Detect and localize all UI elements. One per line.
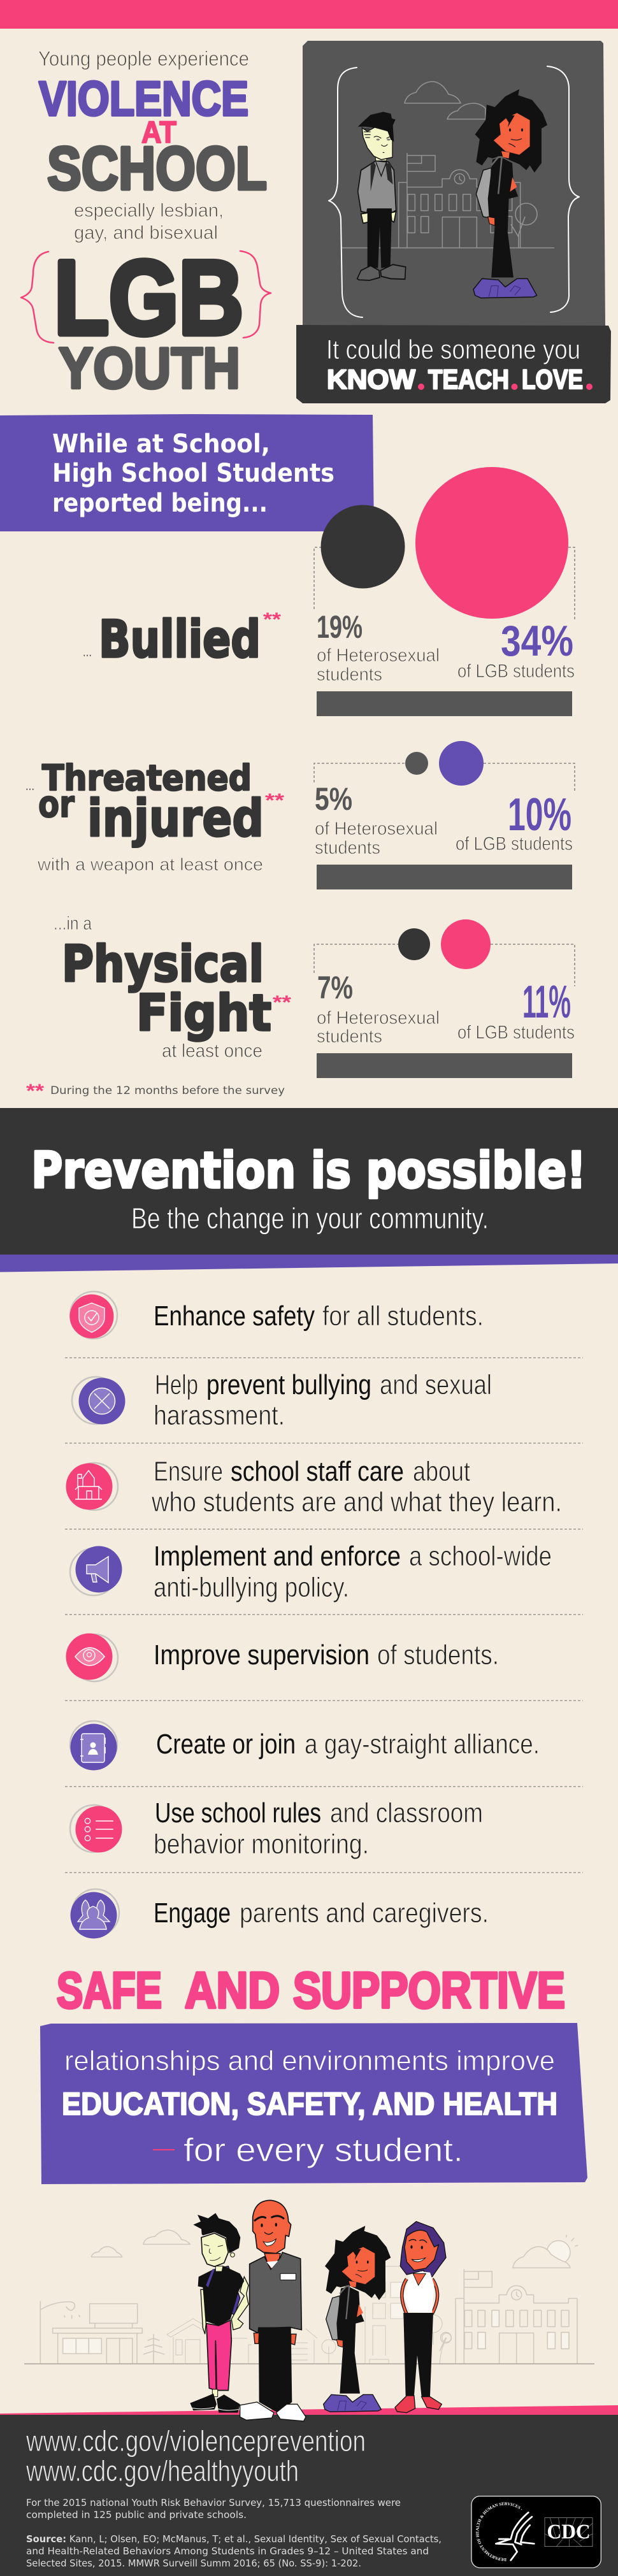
panel: relationships and environments: relationships and environments improve bbox=[64, 2045, 555, 2076]
stat: threatened or injured: 10% bbox=[508, 789, 571, 840]
banner: while at school: reported being... bbox=[52, 489, 268, 518]
stat: threatened or injured: ** bbox=[265, 790, 284, 811]
survey note and source: For the 2015 national Youth Risk Behavior Survey, 15,713 questionnaires were bbox=[26, 2497, 401, 2508]
item: enhance safety: Enhance safety bbox=[154, 1300, 315, 1332]
footnote: During the 12 months before the survey bbox=[50, 1084, 285, 1097]
banner: while at school: High School Students bbox=[52, 459, 334, 488]
heading block: violence at school, LGB youth: especially lesbian, bbox=[74, 200, 224, 221]
item: implement and enforce: a school-wide bbox=[409, 1541, 552, 1572]
item: enhance safety: for all students. bbox=[322, 1300, 484, 1332]
heading block: violence at school, LGB youth: VIOLENCE bbox=[39, 72, 248, 126]
item: gay-straight alliance: a gay-straight alliance. bbox=[305, 1729, 540, 1760]
item: prevent bullying: harassment. bbox=[154, 1400, 285, 1431]
stat: bullied bbox=[83, 467, 575, 716]
item: school staff care: Ensure bbox=[154, 1456, 223, 1487]
item: engage parents bbox=[70, 1889, 489, 1938]
stat: bullied: 34% bbox=[501, 617, 573, 665]
character: sad boy bbox=[357, 112, 406, 280]
heading block: violence at school, LGB youth: gay, and bisexual bbox=[74, 222, 218, 243]
panel: it could be someone you know, teach, love: KNOW bbox=[327, 364, 415, 395]
stat: physical fight: ...in a bbox=[54, 913, 92, 934]
stat: threatened or injured: ... bbox=[25, 777, 34, 793]
stat: threatened or injured: of LGB students bbox=[456, 833, 573, 854]
character: girl with backpack bbox=[324, 2226, 391, 2412]
footer links: www.cdc.gov/healthyyouth bbox=[25, 2454, 299, 2487]
stat: bullied: ... bbox=[83, 644, 92, 659]
panel: prevention is possible: Be the change in your community. bbox=[131, 1202, 489, 1235]
logo: HHS and CDC: DEPARTMENT OF HEALTH & HUMAN SERVICES - USA bbox=[475, 2502, 522, 2561]
panel: it could be someone you know, teach, love: It could be someone you bbox=[326, 335, 580, 365]
character: sad girl bbox=[473, 89, 547, 298]
item: engage parents: parents and caregivers. bbox=[240, 1897, 489, 1929]
stat: physical fight bbox=[54, 913, 575, 1078]
footnote bbox=[26, 1081, 285, 1102]
item: school rules: and classroom bbox=[330, 1797, 483, 1829]
banner: while at school bbox=[0, 414, 374, 531]
stat: threatened or injured: with a weapon at least once bbox=[37, 854, 263, 874]
stat: physical fight: ** bbox=[273, 992, 291, 1013]
stat: physical fight: of LGB students bbox=[457, 1022, 575, 1043]
item: school staff care bbox=[66, 1456, 562, 1518]
item: enhance safety bbox=[70, 1292, 484, 1339]
dashed dividers bbox=[65, 1358, 583, 1873]
stat: physical fight: Physical bbox=[62, 936, 264, 993]
illustration: town outline bbox=[24, 2230, 594, 2364]
item: implement and enforce bbox=[70, 1541, 552, 1603]
stat: threatened or injured: or bbox=[38, 782, 75, 826]
footnote: ** bbox=[26, 1081, 44, 1102]
item: engage parents: Engage bbox=[154, 1897, 231, 1929]
stat: bullied: ** bbox=[263, 609, 281, 630]
heading: safe and supportive: AND bbox=[185, 1962, 280, 2018]
stat: physical fight: students bbox=[317, 1026, 382, 1047]
panel: it could be someone you know, teach, love: TEACH bbox=[428, 364, 509, 395]
character: woman with purple hair bbox=[395, 2222, 446, 2413]
illustration: four people bbox=[190, 2200, 446, 2421]
banner: while at school: While at School, bbox=[52, 429, 270, 459]
panel: grey school scene with two students bbox=[303, 41, 605, 326]
stat: physical fight: 11% bbox=[522, 977, 571, 1028]
stat: physical fight: Fight bbox=[136, 985, 271, 1042]
logo: HHS and CDC bbox=[471, 2496, 601, 2568]
pink ground strip bbox=[0, 2405, 618, 2415]
panel: it could be someone you know, teach, love: LOVE bbox=[522, 364, 583, 395]
heading block: violence at school, LGB youth: SCHOOL bbox=[47, 134, 267, 203]
panel: it could be someone you know, teach, love bbox=[296, 325, 611, 403]
heading block: violence at school, LGB youth: AT bbox=[141, 116, 176, 150]
stat: threatened or injured bbox=[25, 741, 575, 889]
footer links: www.cdc.gov/violenceprevention bbox=[25, 2424, 366, 2457]
panel: relationships and environments bbox=[40, 2023, 587, 2184]
item: prevent bullying: prevent bullying bbox=[206, 1369, 371, 1400]
stat: physical fight: at least once bbox=[162, 1040, 262, 1061]
survey note and source bbox=[26, 2497, 442, 2569]
item: prevent bullying: Help bbox=[155, 1369, 198, 1400]
heading: safe and supportive: SAFE bbox=[57, 1962, 162, 2018]
top pink band bbox=[0, 0, 618, 29]
item: school rules: Use school rules bbox=[155, 1797, 321, 1829]
stat: bullied: Bullied bbox=[99, 610, 261, 669]
panel: prevention is possible bbox=[0, 1108, 618, 1272]
survey note and source: Selected Sites, 2015. MMWR Surveill Summ 2016; 65 (No. SS-9): 1-202. bbox=[26, 2558, 361, 2569]
heading block: violence at school, LGB youth: Young people experience bbox=[38, 47, 249, 70]
heading: safe and supportive bbox=[57, 1962, 565, 2018]
character: student with pink pants bbox=[190, 2213, 248, 2413]
stat: threatened or injured: of Heterosexual bbox=[315, 819, 438, 839]
item: school rules: behavior monitoring. bbox=[154, 1829, 369, 1860]
heading: safe and supportive: SUPPORTIVE bbox=[293, 1962, 565, 2018]
stat: threatened or injured: students bbox=[315, 838, 380, 858]
survey note and source: and Health-Related Behaviors Among Students in Grades 9–12 – United States and bbox=[26, 2545, 429, 2557]
character: bald teacher bbox=[240, 2200, 306, 2421]
item: improve supervision: of students. bbox=[377, 1639, 499, 1671]
stat: threatened or injured: 5% bbox=[315, 781, 352, 817]
heading block: violence at school, LGB youth: LGB bbox=[54, 239, 243, 356]
item: school staff care: about bbox=[413, 1456, 470, 1487]
stat: bullied: 19% bbox=[317, 609, 363, 645]
item: gay-straight alliance: Create or join bbox=[156, 1729, 296, 1760]
item: school rules bbox=[70, 1797, 483, 1860]
heading block: violence at school, LGB youth: YOUTH bbox=[59, 336, 240, 401]
item: school staff care: who students are and what they learn. bbox=[151, 1486, 562, 1518]
item: gay-straight alliance bbox=[70, 1721, 540, 1770]
stat: bullied: of Heterosexual bbox=[317, 645, 440, 666]
item: implement and enforce: anti-bullying policy. bbox=[154, 1572, 349, 1603]
item: improve supervision: Improve supervision bbox=[154, 1639, 370, 1671]
item: improve supervision bbox=[66, 1634, 499, 1681]
footer links bbox=[25, 2424, 366, 2487]
item: prevent bullying: and sexual bbox=[380, 1369, 492, 1400]
item: prevent bullying bbox=[72, 1369, 492, 1431]
stat: physical fight: of Heterosexual bbox=[317, 1008, 440, 1028]
footer panel bbox=[0, 2415, 618, 2576]
item: school staff care: school staff care bbox=[231, 1456, 404, 1487]
stat: threatened or injured: Threatened bbox=[42, 758, 252, 798]
stat: bullied: students bbox=[317, 665, 382, 685]
panel: relationships and environments: for every student. bbox=[183, 2132, 463, 2169]
stat: physical fight: 7% bbox=[317, 970, 353, 1005]
stat: threatened or injured: injured bbox=[87, 789, 264, 848]
logo: HHS and CDC: CDC bbox=[547, 2521, 591, 2544]
item: implement and enforce: Implement and enforce bbox=[154, 1541, 401, 1572]
survey note and source: completed in 125 public and private schools. bbox=[26, 2509, 247, 2521]
panel: relationships and environments: EDUCATION, SAFETY, AND HEALTH bbox=[62, 2086, 557, 2122]
heading block: violence at school, LGB youth bbox=[21, 47, 271, 401]
survey note and source: Source: Kann, L; Olsen, EO; McManus, T; et al., Sexual Identity, Sex of Sexual Contacts, bbox=[26, 2533, 442, 2545]
stat: bullied: of LGB students bbox=[457, 661, 575, 682]
